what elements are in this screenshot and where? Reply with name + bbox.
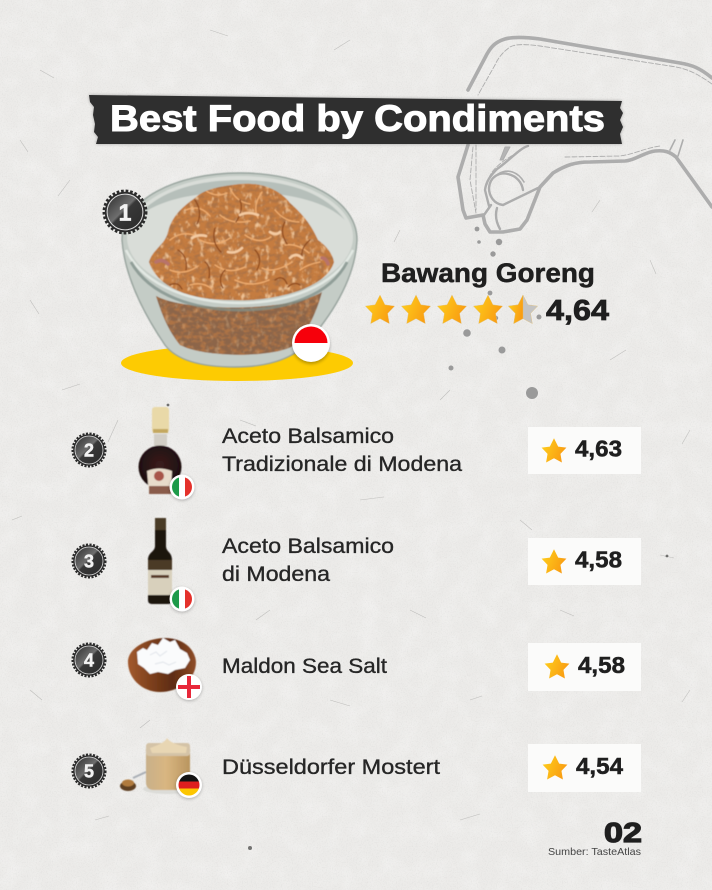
score card <box>528 744 641 792</box>
badge: rank 1: 1 <box>119 199 132 225</box>
page number: 02 <box>604 817 642 848</box>
score card: 4,58 <box>578 652 625 678</box>
name: Aceto Balsamico <box>222 424 394 448</box>
dish name: Bawang Goreng <box>381 258 595 288</box>
title banner <box>89 95 623 144</box>
mustard jar and spoon <box>120 738 191 794</box>
badge: rank 3 <box>73 545 105 577</box>
badge: rank 5: 5 <box>84 762 94 782</box>
score card <box>528 427 641 474</box>
name: Tradizionale di Modena <box>222 452 462 476</box>
name: Düsseldorfer Mostert <box>222 755 440 779</box>
hand illustration pinching <box>458 38 712 232</box>
flag: Germany <box>176 772 202 799</box>
name: di Modena <box>222 562 330 586</box>
bottle: traditional balsamic <box>138 407 182 494</box>
flag: Indonesia <box>292 324 330 364</box>
glass bowl with fried shallots <box>122 173 357 367</box>
badge: rank 4: 4 <box>84 650 94 670</box>
rating score: 4,64 <box>546 295 609 327</box>
title text: Best Food by Condiments <box>110 98 605 139</box>
badge: rank 2: 2 <box>84 440 94 460</box>
row 4: Maldon Sea Salt <box>73 638 641 701</box>
falling salt dots <box>448 227 542 399</box>
score card <box>528 643 641 691</box>
flag: Italy <box>170 474 194 500</box>
score card: 4,63 <box>575 436 622 462</box>
badge: rank 1 <box>105 192 145 232</box>
badge: rank 2 <box>73 434 105 466</box>
badge: rank 3: 3 <box>84 552 94 572</box>
flag: England <box>176 674 202 701</box>
score card <box>528 538 641 585</box>
badge: rank 4 <box>73 644 105 676</box>
yellow shadow ellipse <box>121 345 353 381</box>
score card: 4,58 <box>575 546 622 572</box>
score card: 4,54 <box>576 753 623 779</box>
row 2: Aceto Balsamico Tradizionale di Modena <box>73 407 641 500</box>
first place: Bawang Goreng <box>105 173 609 381</box>
wooden bowl of salt <box>128 638 196 692</box>
bottle: balsamic vinegar <box>148 518 172 604</box>
rating stars <box>365 295 538 324</box>
flag: Italy <box>170 586 194 612</box>
row 3: Aceto Balsamico di Modena <box>73 518 641 612</box>
name: Maldon Sea Salt <box>222 654 387 678</box>
source credit: Sumber: TasteAtlas <box>548 846 641 858</box>
name: Aceto Balsamico <box>222 534 394 558</box>
row 5: Düsseldorfer Mostert <box>73 738 641 799</box>
badge: rank 5 <box>73 755 105 787</box>
